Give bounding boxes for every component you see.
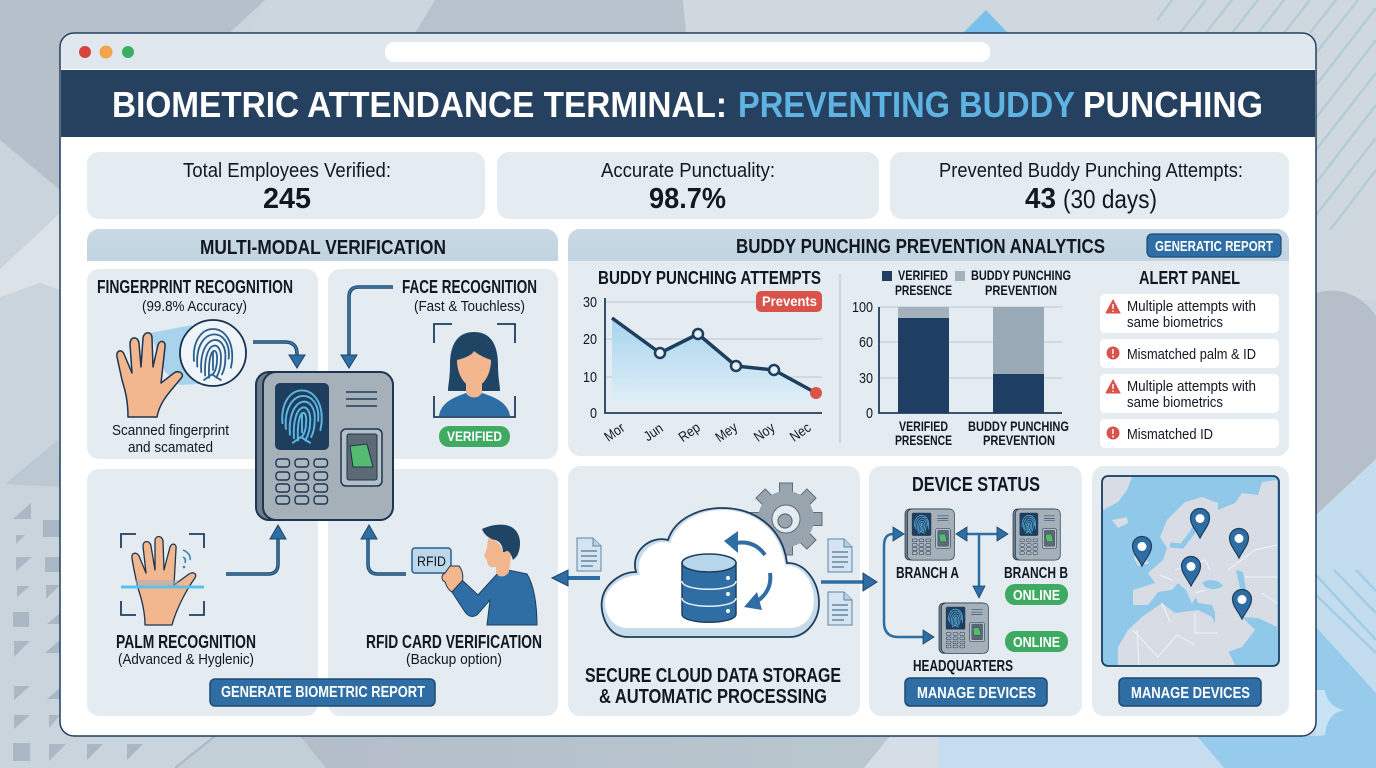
alert: multiple attempts repeated: Multiple attempts with xyxy=(1127,378,1256,395)
panel: secure cloud data storage xyxy=(568,466,860,716)
alert: mismatched ID: Mismatched ID xyxy=(1127,426,1213,443)
panel: fingerprint recognition: FINGERPRINT RECOGNITION xyxy=(97,277,293,297)
bar chart legend: BUDDY PUNCHING xyxy=(971,267,1071,283)
arrow: cloud to devices xyxy=(821,573,877,591)
KPI: accurate punctuality: 98.7% xyxy=(649,183,726,215)
panel: fingerprint recognition: and scamated xyxy=(128,439,213,456)
title banner xyxy=(61,70,1315,137)
arrow: fingerprint to terminal xyxy=(253,342,305,368)
device: headquarters xyxy=(913,603,1013,675)
title banner: PREVENTING BUDDY xyxy=(738,84,1075,125)
section heading: multi-modal verification: MULTI-MODAL VERIFICATION xyxy=(200,237,446,259)
panel: branch map xyxy=(1092,466,1289,716)
panel: palm recognition xyxy=(87,469,318,716)
badge: online headquarters xyxy=(1005,631,1068,652)
panel: RFID card verification xyxy=(328,469,558,716)
stacked bar chart: VERIFIED xyxy=(899,418,948,434)
KPI: prevented buddy punching attempts: Prevented Buddy Punching Attempts: xyxy=(939,160,1243,182)
badge: verified xyxy=(439,426,510,447)
KPI: accurate punctuality: Accurate Punctuality: xyxy=(601,160,775,182)
KPI: prevented buddy punching attempts: 43 xyxy=(1025,183,1056,215)
icon: person holding RFID card xyxy=(412,525,537,625)
button: manage devices map xyxy=(1119,678,1261,706)
icon: sync arrows xyxy=(724,531,770,610)
browser title bar xyxy=(61,34,1315,69)
button: generate biometric report: GENERATE BIOMETRIC REPORT xyxy=(221,684,425,701)
icon: gear xyxy=(750,483,822,555)
line chart: buddy punching attempts: 20 xyxy=(583,331,597,348)
button: manage devices: MANAGE DEVICES xyxy=(917,685,1036,702)
device: branch B xyxy=(1004,509,1068,582)
button: generatic report xyxy=(1147,234,1281,257)
alert: multiple attempts repeated xyxy=(1100,374,1279,413)
panel: face recognition: FACE RECOGNITION xyxy=(402,277,537,297)
badge: prevents: Prevents xyxy=(762,293,817,309)
panel: buddy punching prevention analytics xyxy=(568,229,1289,456)
icon: person holding RFID card: RFID xyxy=(417,554,446,569)
title banner: BIOMETRIC ATTENDANCE TERMINAL: xyxy=(112,84,727,125)
arrow: cloud to terminal panel xyxy=(552,570,600,586)
panel: fingerprint recognition: Scanned fingerprint xyxy=(112,422,230,439)
panel: face recognition xyxy=(328,269,558,459)
alert: multiple attempts: Multiple attempts with xyxy=(1127,298,1256,315)
KPI: total employees verified: 245 xyxy=(263,183,311,215)
badge: prevents xyxy=(756,291,822,312)
alert panel: ALERT PANEL xyxy=(1139,268,1240,288)
line chart: buddy punching attempts: 30 xyxy=(583,294,597,311)
arrow: RFID to terminal xyxy=(361,525,406,574)
alert: mismatched palm and ID xyxy=(1100,339,1279,368)
stacked bar chart: 30 xyxy=(859,370,873,387)
line chart: buddy punching attempts: Mey xyxy=(712,419,741,445)
bar chart legend: PRESENCE xyxy=(895,282,952,298)
panel: fingerprint recognition xyxy=(87,269,318,459)
title banner: PUNCHING xyxy=(1083,84,1263,125)
KPI: accurate punctuality xyxy=(497,152,879,219)
device: branch A xyxy=(896,509,959,582)
icon: face scan person xyxy=(434,324,515,417)
KPI: prevented buddy punching attempts xyxy=(890,152,1289,219)
icon: document left xyxy=(577,538,601,571)
line chart: buddy punching attempts: Nec xyxy=(787,419,814,445)
alert: multiple attempts repeated: same biometrics xyxy=(1127,394,1223,411)
biometric terminal device xyxy=(256,372,393,520)
icon: open hand xyxy=(117,333,182,417)
line chart: buddy punching attempts: Noy xyxy=(751,419,778,445)
panel: device status xyxy=(869,466,1082,716)
icon: cloud xyxy=(602,508,819,637)
panel: RFID card verification: RFID CARD VERIFICATION xyxy=(366,632,542,652)
icon: magnified fingerprint xyxy=(180,320,246,386)
panel: face recognition: (Fast & Touchless) xyxy=(414,298,525,315)
panel: palm recognition: PALM RECOGNITION xyxy=(116,632,256,652)
alert: multiple attempts: same biometrics xyxy=(1127,314,1223,331)
alert panel xyxy=(1100,268,1279,448)
line chart: buddy punching attempts: 0 xyxy=(590,405,597,422)
bar chart legend: PREVENTION xyxy=(985,282,1057,298)
line chart: buddy punching attempts: Jun xyxy=(641,420,666,444)
panel: buddy punching prevention analytics: BUDDY PUNCHING PREVENTION ANALYTICS xyxy=(736,236,1105,258)
panel: secure cloud data storage: SECURE CLOUD DATA STORAGE xyxy=(585,665,841,687)
panel: device status: DEVICE STATUS xyxy=(912,474,1040,496)
line chart: buddy punching attempts: Rep xyxy=(675,419,703,445)
stacked bar chart: 0 xyxy=(866,405,873,422)
stacked bar chart xyxy=(840,267,1071,448)
map pins xyxy=(1132,508,1252,619)
panel: RFID card verification: (Backup option) xyxy=(406,651,502,668)
line chart: buddy punching attempts: 10 xyxy=(583,369,597,386)
analytics heading band xyxy=(568,229,1289,261)
address bar xyxy=(385,42,990,62)
icon: scan beam xyxy=(150,325,200,385)
bar chart legend xyxy=(882,267,1071,298)
badge: online branch B xyxy=(1005,584,1068,605)
stacked bar chart: PRESENCE xyxy=(895,432,952,448)
traffic light buttons xyxy=(79,46,134,58)
map of Europe and Middle East xyxy=(1102,476,1279,666)
stacked bar chart: BUDDY PUNCHING xyxy=(968,418,1069,434)
button: generate biometric report xyxy=(210,679,435,706)
badge: verified: VERIFIED xyxy=(447,428,502,444)
KPI: total employees verified: Total Employees Verified: xyxy=(183,160,391,182)
device: branch B: BRANCH B xyxy=(1004,565,1068,582)
stacked bar chart: 60 xyxy=(859,334,873,351)
line chart: buddy punching attempts: Mor xyxy=(601,419,628,445)
alert: mismatched palm and ID: Mismatched palm & ID xyxy=(1127,346,1256,363)
arrow: face to terminal xyxy=(341,287,393,368)
KPI: total employees verified xyxy=(87,152,485,219)
icon: database xyxy=(682,554,736,622)
arrows: device network links xyxy=(884,527,1008,644)
line chart: buddy punching attempts xyxy=(583,268,822,445)
line chart: buddy punching attempts: BUDDY PUNCHING ATTEMPTS xyxy=(598,268,821,288)
button: manage devices xyxy=(905,678,1047,706)
section heading: multi-modal verification xyxy=(87,229,558,261)
icon: palm scan xyxy=(121,534,204,625)
device: branch A: BRANCH A xyxy=(896,565,959,582)
stacked bar chart: PREVENTION xyxy=(983,432,1055,448)
button: generatic report: GENERATIC REPORT xyxy=(1155,238,1273,255)
icon: document right bottom xyxy=(828,592,852,625)
arrow: palm to terminal xyxy=(226,525,286,574)
badge: online headquarters: ONLINE xyxy=(1013,634,1060,651)
stacked bar chart: 100 xyxy=(852,299,873,316)
panel: palm recognition: (Advanced & Hyglenic) xyxy=(118,651,254,668)
bar chart legend: VERIFIED xyxy=(898,267,948,283)
button: manage devices map: MANAGE DEVICES xyxy=(1131,685,1250,702)
alert: multiple attempts xyxy=(1100,294,1279,333)
panel: secure cloud data storage: & AUTOMATIC PROCESSING xyxy=(599,686,827,708)
badge: online branch B: ONLINE xyxy=(1013,587,1060,604)
icon: document right top xyxy=(828,539,852,572)
alert: mismatched ID xyxy=(1100,419,1279,448)
panel: fingerprint recognition: (99.8% Accuracy) xyxy=(142,298,247,315)
KPI: prevented buddy punching attempts: (30 days) xyxy=(1063,184,1157,214)
device: headquarters: HEADQUARTERS xyxy=(913,658,1013,675)
